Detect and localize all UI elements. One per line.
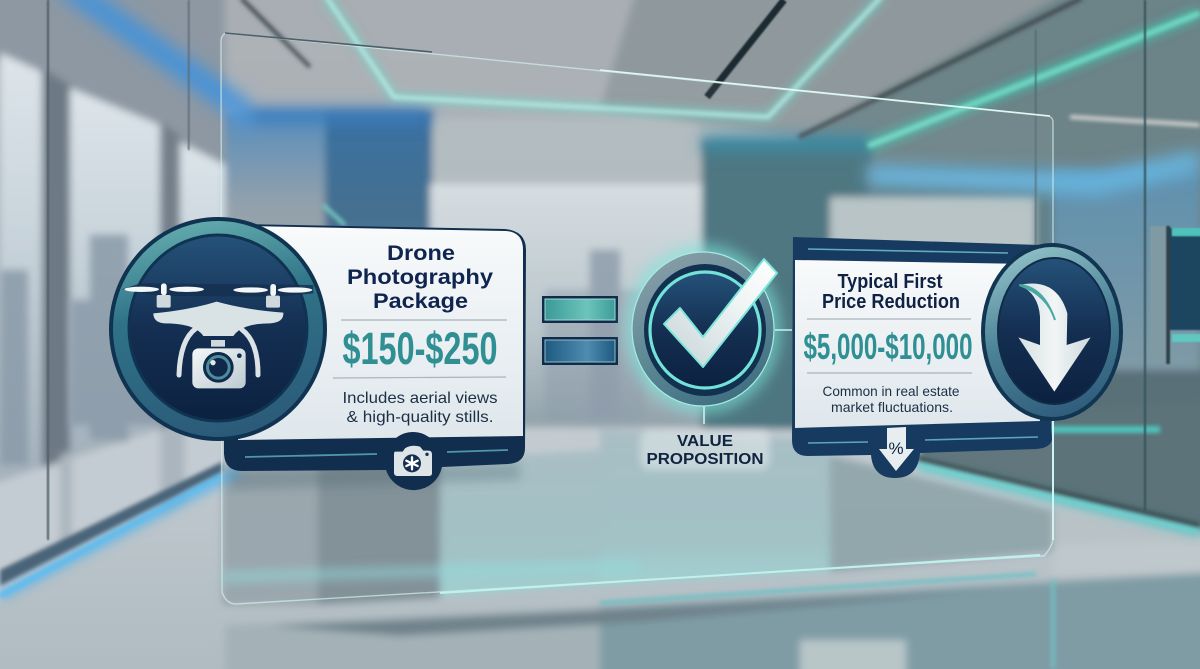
distant skyline [0, 235, 645, 465]
price: 150 to 250 dollars: $150-$250 [342, 323, 498, 374]
panel: drone photography package [109, 217, 526, 490]
icon: down arrow badge [981, 243, 1123, 421]
label: value proposition: VALUE [677, 433, 733, 450]
card base and bump [224, 224, 526, 490]
heading: drone photography package: Photography [347, 266, 493, 289]
description: market fluctuations. [831, 399, 953, 415]
description: & high-quality stills. [346, 409, 494, 426]
heading: drone photography package [347, 242, 493, 313]
description [822, 383, 960, 415]
glass panel [221, 33, 1053, 604]
card shadow [230, 462, 520, 490]
icon: drone badge [109, 217, 327, 441]
label: value proposition [640, 430, 770, 470]
card base and arrow tab: % [888, 439, 904, 458]
description: Includes aerial views [342, 390, 498, 407]
heading: typical first price reduction: Typical First [838, 271, 943, 293]
label: value proposition: PROPOSITION [646, 451, 764, 468]
icon: equals sign [542, 296, 618, 365]
description [342, 390, 498, 426]
icon: value proposition check badge [625, 244, 792, 424]
heading: drone photography package: Drone [387, 242, 455, 265]
price: 5000 to 10000 dollars: $5,000-$10,000 [804, 326, 972, 367]
heading: typical first price reduction: Price Reduction [822, 291, 960, 313]
heading: typical first price reduction [822, 271, 960, 313]
heading: drone photography package: Package [373, 290, 468, 313]
description: Common in real estate [822, 383, 960, 399]
panel: typical first price reduction [792, 237, 1123, 478]
card base and arrow tab [792, 237, 1052, 478]
icon: small camera [394, 446, 432, 476]
